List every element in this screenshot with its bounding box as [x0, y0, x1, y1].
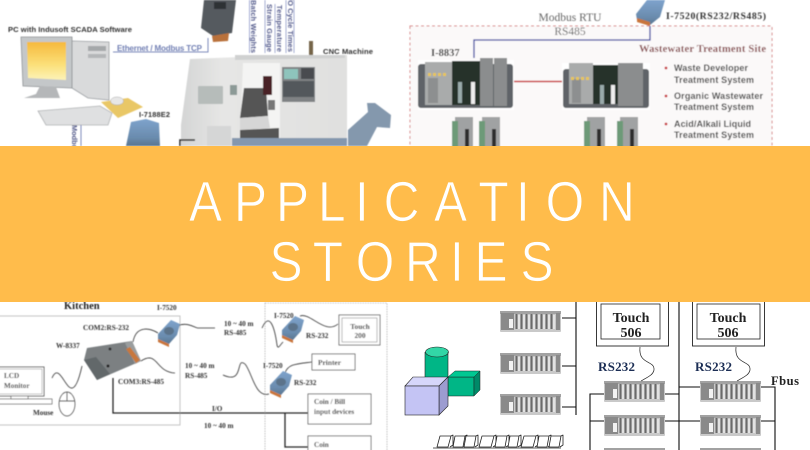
bullet list: treatment systems — [665, 63, 763, 140]
box: Touch 506 right — [692, 296, 764, 346]
label: RS232 right: RS232 — [695, 359, 732, 374]
label: CNC Machine: CNC Machine — [323, 47, 373, 56]
labels: kitchen wiring: I-7520 — [263, 362, 283, 370]
labels: kitchen wiring: RS-485 — [185, 372, 208, 380]
icon: CNC machine — [180, 41, 391, 146]
labels: kitchen wiring: 10 ~ 40 m — [204, 422, 234, 430]
connection: Ethernet line — [113, 38, 208, 52]
panel: CNC machine SCADA diagram — [8, 0, 391, 153]
bullet list: treatment systems: Treatment System — [674, 75, 754, 85]
label: Kitchen: Kitchen — [64, 301, 100, 312]
icon: desktop PC — [21, 37, 143, 125]
box: Coin / Bill input devices — [308, 394, 371, 424]
label: I-7520: I-7520(RS232/RS485) — [666, 11, 766, 22]
box: Touch 506 right: Touch — [710, 311, 747, 326]
label: Modbus vertical: Modbus — [70, 125, 79, 153]
title: APPLICATION — [189, 171, 635, 234]
box: Coin / Bill input devices: Coin / Bill — [314, 398, 345, 406]
icon: purple cube — [405, 377, 448, 415]
labels: kitchen wiring: 10 ~ 40 m — [224, 320, 254, 328]
box: Coin: Coin — [314, 441, 329, 449]
signal labels vertical: Strain Gauge — [265, 4, 274, 52]
label: Modbus RTU RS485: Modbus RTU — [539, 12, 602, 24]
panel: kitchen POS diagram — [0, 301, 387, 450]
bullet list: treatment systems: Treatment System — [674, 130, 754, 140]
icon: I-7188E2 module — [126, 119, 160, 146]
bullet list: treatment systems: Waste Developer — [674, 63, 748, 73]
box: Coin / Bill input devices: input devices — [314, 408, 354, 416]
panel: touch panel network diagram — [405, 296, 799, 450]
label: Modbus RTU RS485: RS485 — [554, 26, 586, 38]
icon: I-7520 converter — [636, 0, 665, 26]
label: LCD Monitor: LCD — [4, 372, 19, 380]
kitchen boundary — [0, 316, 180, 425]
icon: I/O modules — [452, 117, 638, 147]
bullet list: treatment systems: Acid/Alkali Liquid — [674, 119, 751, 129]
labels: kitchen wiring: W-8337 — [56, 342, 80, 350]
box: Touch 506 left — [596, 296, 668, 346]
labels: kitchen wiring: 10 ~ 40 m — [185, 362, 215, 370]
icon: top gateway module — [201, 0, 236, 42]
labels: kitchen wiring: I/O — [212, 405, 223, 413]
signal labels vertical — [249, 0, 295, 53]
signal labels vertical: Temperature — [275, 5, 284, 52]
title — [189, 171, 635, 294]
labels: kitchen wiring — [33, 304, 329, 430]
wiring curves — [52, 316, 338, 394]
box: Touch 200: 200 — [354, 331, 366, 340]
icon: rack two — [562, 63, 650, 110]
labels: kitchen wiring: RS-232 — [306, 332, 329, 340]
labels: kitchen wiring: RS-485 — [224, 329, 247, 337]
label: Fbus: Fbus — [771, 374, 799, 388]
icon: converters — [158, 316, 304, 398]
box: Touch 506 right: 506 — [718, 326, 738, 341]
icon: green cube — [448, 371, 480, 396]
bullet list: treatment systems: Organic Wastewater — [674, 91, 763, 101]
bus line I/O — [113, 378, 308, 447]
bus lines — [562, 302, 775, 450]
site boundary — [410, 26, 772, 166]
box: Printer: Printer — [318, 358, 342, 367]
labels: kitchen wiring: I-7520 — [274, 312, 294, 320]
signal labels vertical: Batch Weights — [249, 0, 258, 53]
label: I-8837: I-8837 — [431, 48, 460, 59]
banner — [0, 146, 810, 302]
box: Touch 200 — [339, 315, 380, 345]
label: I-7188E2: I-7188E2 — [139, 110, 170, 119]
icon: W-8337 controller — [84, 341, 141, 380]
box: Coin — [308, 436, 371, 450]
RS232 cables — [640, 347, 750, 381]
labels: kitchen wiring: COM3:RS-485 — [118, 378, 164, 386]
title: STORIES — [270, 231, 554, 294]
connection: blue bus — [474, 26, 650, 58]
labels: kitchen wiring: RS-232 — [294, 379, 317, 387]
box: Touch 506 left: Touch — [613, 311, 650, 326]
label: Ethernet / Modbus TCP: Ethernet / Modbus TCP — [117, 44, 203, 53]
labels: kitchen wiring: Mouse — [33, 409, 53, 417]
connection: Modbus line — [80, 125, 82, 146]
site boundary — [265, 303, 387, 450]
label: LCD Monitor: Monitor — [4, 382, 30, 390]
label: Wastewater Treatment Site: Wastewater Treatment Site — [639, 44, 766, 55]
icon: left racks — [500, 311, 561, 415]
labels: kitchen wiring: I-7520 — [157, 304, 177, 312]
label: PC software: PC with Indusoft SCADA Software — [8, 25, 132, 34]
labels: kitchen wiring: COM2:RS-232 — [83, 324, 129, 332]
icon: LCD monitor — [0, 367, 52, 404]
label: RS232 left: RS232 — [598, 359, 635, 374]
box: Printer — [312, 354, 355, 370]
icon: mouse — [59, 392, 75, 416]
icon: keyboard blocks — [433, 435, 563, 448]
bullet list: treatment systems: Treatment System — [674, 102, 754, 112]
icon: right racks — [604, 381, 761, 450]
icon: rack one — [418, 58, 514, 110]
panel: wastewater treatment site diagram — [410, 0, 772, 166]
box: Touch 200: Touch — [350, 322, 370, 331]
icon: green cylinder — [425, 347, 448, 382]
connection: red link — [514, 80, 563, 82]
box: Touch 506 left: 506 — [620, 326, 642, 341]
